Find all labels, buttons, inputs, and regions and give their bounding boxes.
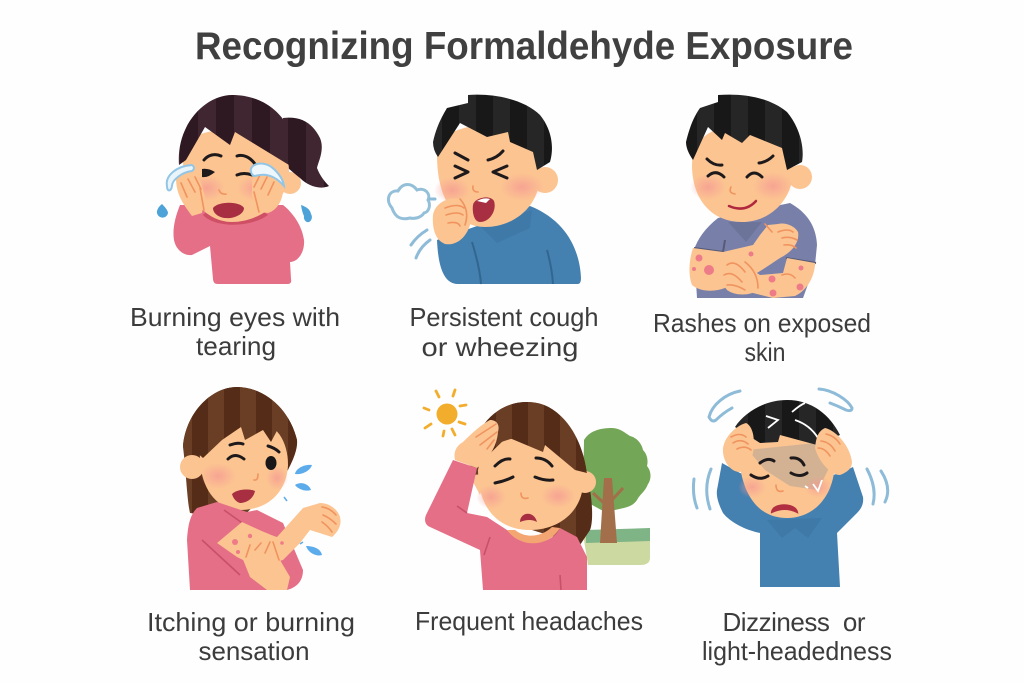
label: Itching or burning	[147, 607, 355, 637]
panel: cough	[388, 95, 598, 362]
label: Burning eyes with	[130, 302, 340, 332]
icon: dizzy boy	[693, 389, 888, 587]
panel: itching: sensation	[198, 636, 310, 666]
icon: girl with headache	[425, 402, 596, 590]
panel: dizziness	[693, 389, 892, 666]
label: Frequent headaches	[415, 606, 643, 636]
title: Recognizing Formaldehyde Exposure	[195, 25, 853, 68]
icon: boy coughing	[388, 95, 581, 284]
icon: tree	[583, 428, 650, 565]
icon: girl crying	[157, 95, 329, 284]
icon: sun	[424, 390, 466, 436]
panel: cough: or wheezing	[422, 332, 578, 362]
icon: girl scratching	[180, 387, 341, 590]
panel: rashes	[653, 95, 871, 367]
panel: burning eyes	[130, 95, 340, 361]
icon: boy with rash	[686, 95, 817, 298]
panel: headaches	[415, 390, 650, 636]
label: Persistent cough	[410, 302, 598, 332]
panel: rashes: skin	[744, 337, 786, 367]
label: Dizziness or	[722, 607, 866, 637]
panel: burning eyes: tearing	[196, 331, 276, 361]
label: Rashes on exposed	[653, 308, 871, 338]
panel: itching	[147, 387, 355, 666]
panel: dizziness: light-headedness	[702, 636, 892, 666]
